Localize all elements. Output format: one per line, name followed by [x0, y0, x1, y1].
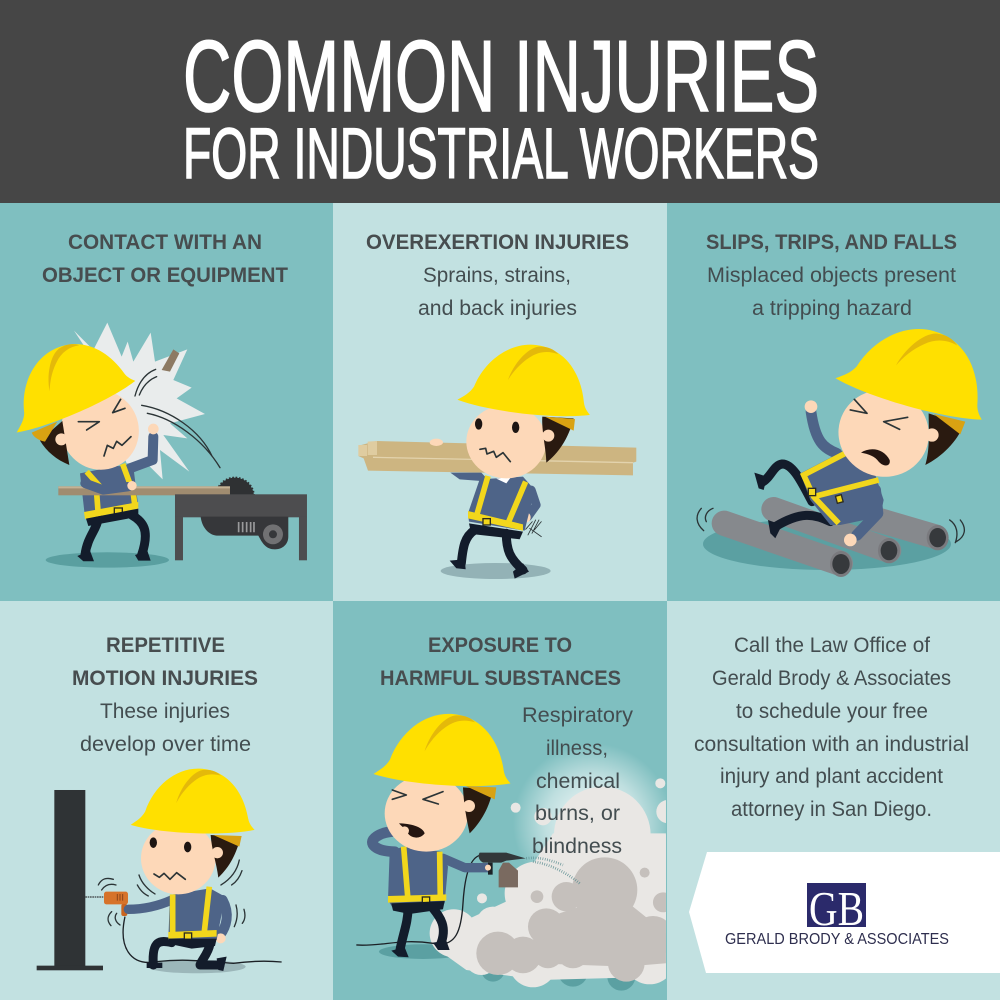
heading and description: slips: Misplaced objects present	[707, 263, 956, 287]
header banner	[0, 0, 1000, 203]
illustration: worker falling over pipes	[697, 309, 1000, 577]
heading and description: repetitive motion: REPETITIVE	[106, 634, 225, 657]
panel: overexertion injuries	[333, 203, 667, 601]
heading and description: slips	[706, 231, 957, 320]
heading and description: slips: SLIPS, TRIPS, AND FALLS	[706, 231, 957, 254]
description: exposure: chemical	[536, 769, 620, 793]
heading: contact with an object	[42, 231, 288, 287]
panel: call to action	[667, 601, 1000, 1000]
teal cloud shadows	[482, 973, 635, 991]
heading and description: repetitive motion: develop over time	[80, 732, 251, 756]
call to action text: consultation with an industrial	[694, 732, 969, 756]
heading and description: overexertion	[366, 231, 629, 320]
description: exposure	[522, 703, 633, 858]
grey cloud	[476, 857, 674, 982]
heading and description: overexertion: and back injuries	[418, 296, 577, 320]
description: exposure: burns, or	[535, 801, 620, 825]
panel: repetitive motion injuries	[0, 601, 333, 1000]
heading: exposure	[380, 634, 621, 690]
illustration: worker drilling into post	[37, 766, 282, 973]
call to action text: attorney in San Diego.	[731, 797, 932, 821]
description: exposure: blindness	[532, 834, 622, 858]
panel: slips, trips, and falls	[667, 203, 1000, 601]
heading and description: repetitive motion: These injuries	[100, 699, 230, 723]
logo wordmark: GERALD BRODY & ASSOCIATES	[725, 931, 949, 948]
heading and description: overexertion: Sprains, strains,	[423, 263, 571, 287]
heading: contact with an object: OBJECT OR EQUIPMENT	[42, 264, 288, 287]
heading and description: repetitive motion: MOTION INJURIES	[72, 667, 258, 690]
description: exposure: Respiratory	[522, 703, 633, 727]
heading: exposure: HARMFUL SUBSTANCES	[380, 667, 621, 690]
illustration: worker carrying lumber on shoulder	[358, 337, 636, 579]
heading: exposure: EXPOSURE TO	[428, 634, 572, 657]
call to action text	[694, 633, 969, 821]
panel: exposure to harmful substances	[333, 601, 667, 1000]
heading: contact with an object: CONTACT WITH AN	[68, 231, 262, 254]
illustration: worker struck by flying debris from saw	[0, 323, 307, 568]
illustration: worker spraying chemical cloud	[356, 714, 666, 991]
heading and description: repetitive motion	[72, 634, 258, 756]
call to action text: injury and plant accident	[720, 764, 943, 788]
call to action text: to schedule your free	[736, 699, 928, 723]
call to action text: Call the Law Office of	[734, 633, 930, 657]
panel: contact with an object or equipment	[0, 203, 333, 601]
description: exposure: illness,	[546, 736, 608, 760]
call to action text: Gerald Brody & Associates	[712, 666, 951, 690]
light cloud	[430, 778, 666, 988]
logo mark: GB: GB	[809, 881, 864, 936]
heading and description: slips: a tripping hazard	[752, 296, 912, 320]
heading and description: overexertion: OVEREXERTION INJURIES	[366, 231, 629, 254]
logo ribbon	[689, 852, 1000, 973]
